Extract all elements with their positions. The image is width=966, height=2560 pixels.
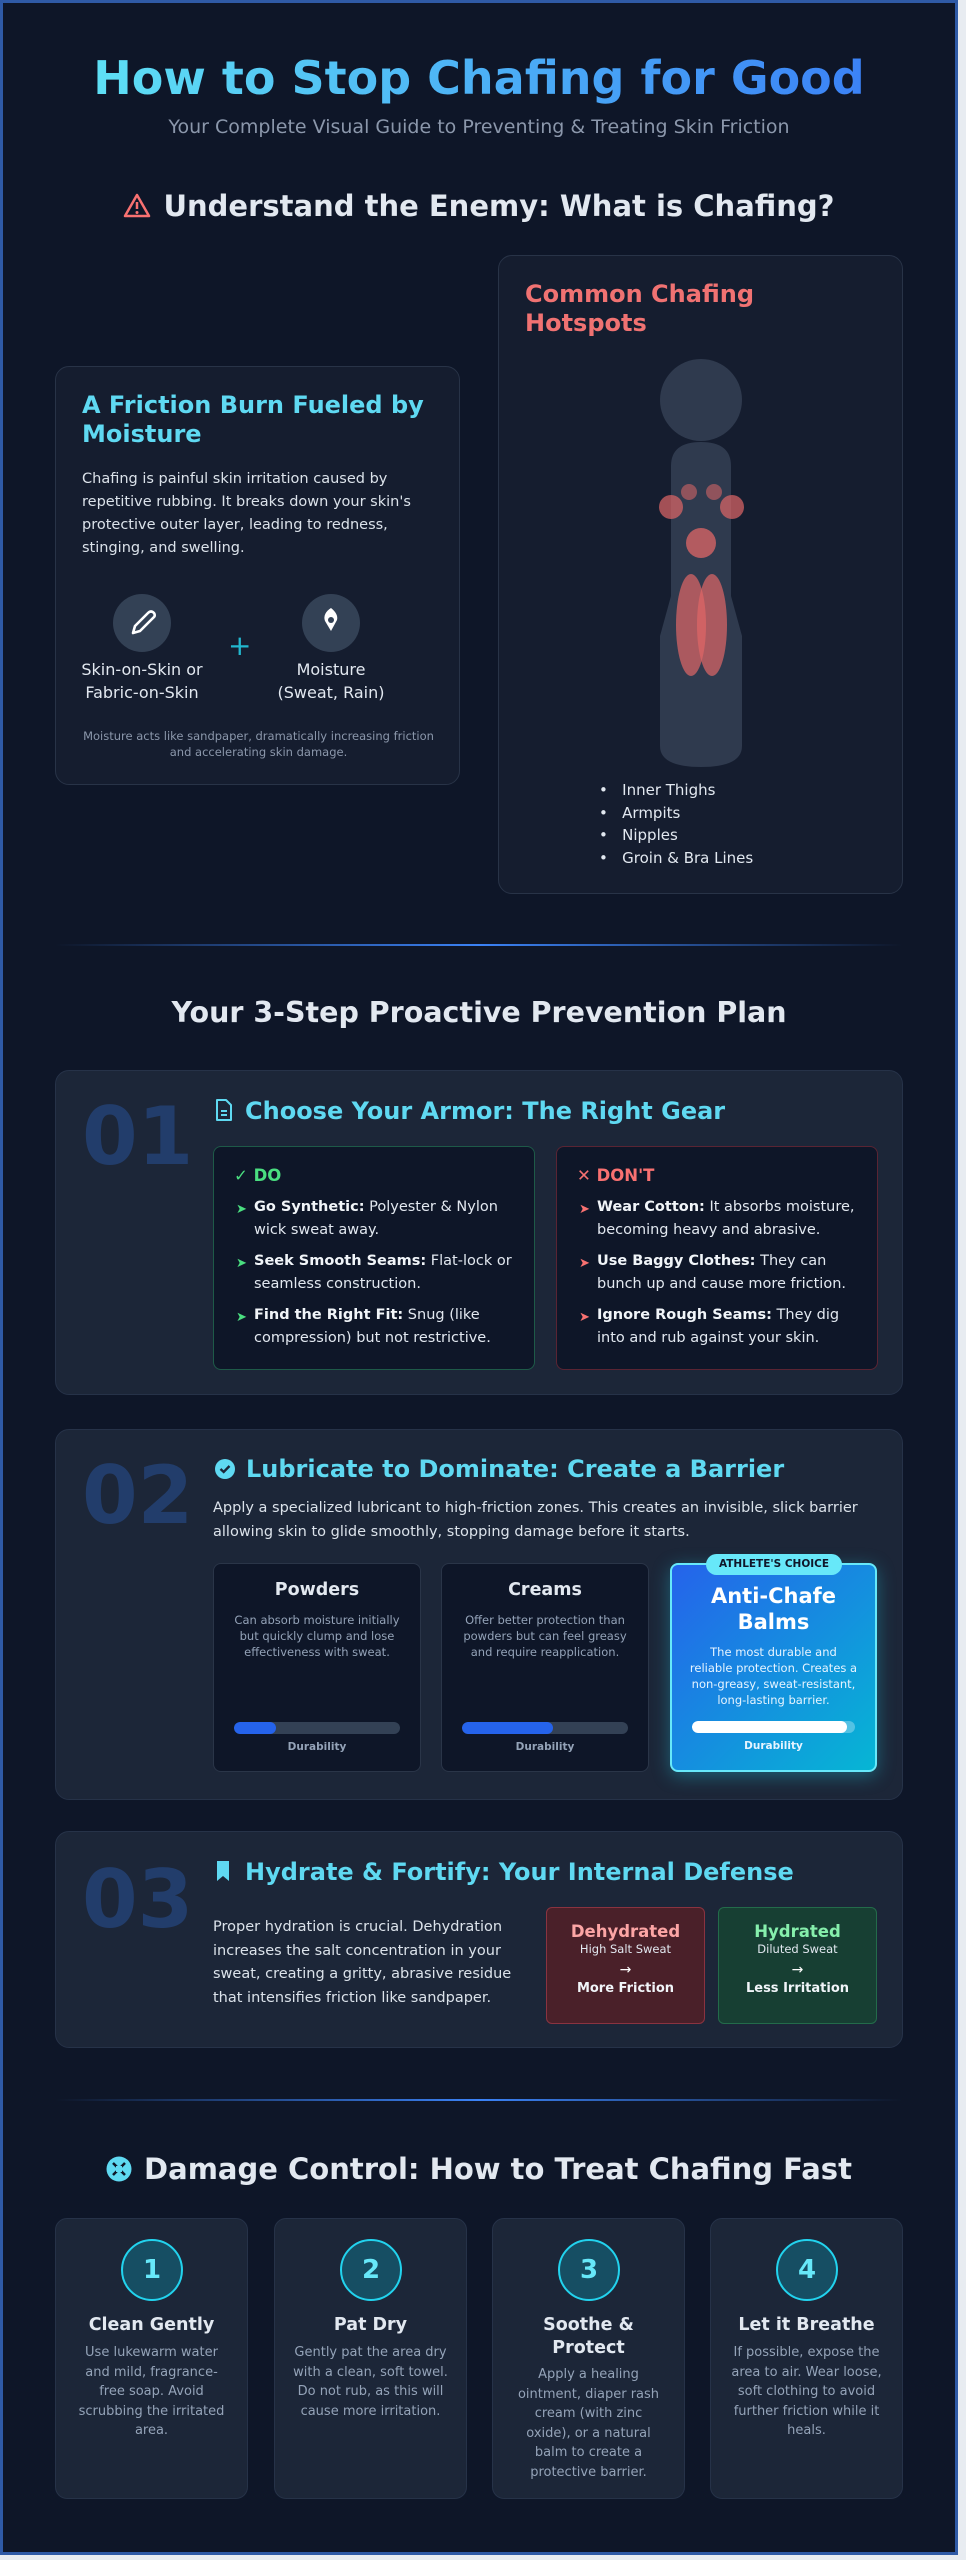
product: powders: Powders: [275, 1580, 359, 1600]
section heading: understand the enemy: Understand the Enemy: What is Chafing?: [163, 189, 834, 223]
big number: 01: [82, 1090, 193, 1183]
panel: step 01: [55, 1070, 903, 1395]
product: powders: Durability: [288, 1741, 346, 1753]
heading: Lubricate to Dominate: Create a Barrier: [246, 1455, 784, 1483]
box: hydrated: [718, 1907, 877, 2024]
product: balms: The most durable and reliable protection. Creates a non-greasy, sweat-resistant, long-lasting barrier.: [690, 1645, 857, 1707]
body diagram: [659, 359, 744, 767]
label: moisture: Moisture: [297, 660, 365, 679]
heading: Common Chafing Hotspots: [525, 280, 754, 337]
step card 1: Clean Gently: [89, 2315, 214, 2335]
icon: bandage: [106, 2156, 132, 2182]
DONT box: Use Baggy Clothes: They can bunch up and cause more friction.: [597, 1253, 846, 1292]
step card 3: [492, 2218, 685, 2499]
DO box: [213, 1146, 535, 1370]
DONT box: ➤: [579, 1202, 590, 1217]
DO box: ➤: [236, 1310, 247, 1325]
icon: moisture: [302, 594, 360, 652]
step card 4: Let it Breathe: [738, 2315, 875, 2335]
product: creams: Durability: [516, 1741, 574, 1753]
step card 2: 2: [362, 2255, 380, 2285]
box: hydrated: Less Irritation: [746, 1981, 849, 1996]
badge: ATHLETE'S CHOICE: [719, 1558, 829, 1570]
subtitle: Your Complete Visual Guide to Preventing & Treating Skin Friction: [168, 116, 790, 138]
box: hydrated: Hydrated: [754, 1922, 841, 1941]
label: skin-on-skin: Fabric-on-Skin: [85, 683, 199, 702]
icon: plus: +: [228, 629, 251, 662]
list: hotspots: • Nipples: [599, 826, 678, 844]
label: skin-on-skin: [81, 660, 203, 702]
box: hydrated: →: [792, 1962, 803, 1978]
step card 3: Soothe &: [543, 2315, 634, 2335]
text block: Proper hydration is crucial. Dehydration increases the salt concentration in your sweat, creating a gritty, abrasive residue that intensifies friction like sandpaper.: [213, 1919, 511, 2006]
box: dehydrated: [546, 1907, 705, 2024]
heading: Choose Your Armor: The Right Gear: [245, 1097, 725, 1125]
box: dehydrated: →: [620, 1962, 631, 1978]
step card 3: Apply a healing ointment, diaper rash cream (with zinc oxide), or a natural balm to create a protective barrier.: [518, 2367, 659, 2480]
step card 3: Protect: [552, 2338, 625, 2358]
product: powders: [213, 1563, 421, 1772]
step card 4: [710, 2218, 903, 2499]
big number: 03: [82, 1853, 193, 1946]
DO box: Seek Smooth Seams: Flat-lock or seamless construction.: [254, 1253, 512, 1292]
title: How to Stop Chafing for Good: [93, 51, 865, 105]
step card 2: Pat Dry: [334, 2315, 407, 2335]
DO box: Go Synthetic: Polyester & Nylon wick sweat away.: [254, 1199, 498, 1238]
product: powders: Can absorb moisture initially but quickly clump and lose effectiveness with sweat.: [234, 1613, 400, 1659]
DO box: ➤: [236, 1256, 247, 1271]
step card 2: Gently pat the area dry with a clean, soft towel. Do not rub, as this will cause more irritation.: [293, 2345, 448, 2418]
label: skin-on-skin: Skin-on-Skin or: [81, 660, 203, 679]
text block: Apply a specialized lubricant to high-friction zones. This creates an invisible, slick barrier allowing skin to glide smoothly, stopping damage before it starts.: [213, 1500, 858, 1540]
product: balms: [670, 1563, 877, 1772]
step card 4: 4: [798, 2255, 816, 2285]
box: dehydrated: More Friction: [577, 1981, 674, 1996]
big number: 02: [82, 1449, 193, 1542]
product: creams: Creams: [508, 1580, 582, 1600]
icon: rubbing: [113, 594, 171, 652]
panel: hotspots: [498, 255, 903, 894]
DONT box: ➤: [579, 1256, 590, 1271]
list: hotspots: • Armpits: [599, 804, 680, 822]
panel: step 03: [55, 1831, 903, 2048]
badge: [706, 1554, 842, 1575]
step card 1: [55, 2218, 248, 2499]
product: balms: Balms: [738, 1610, 809, 1634]
box: dehydrated: High Salt Sweat: [580, 1942, 671, 1956]
DONT box: [556, 1146, 878, 1370]
step card 1: 1: [143, 2255, 161, 2285]
DONT box: ➤: [579, 1310, 590, 1325]
section heading: prevention plan: Your 3-Step Proactive Prevention Plan: [171, 996, 787, 1029]
label: moisture: [278, 660, 384, 702]
section heading: damage control: Damage Control: How to Treat Chafing Fast: [144, 2152, 852, 2186]
step card 2: [274, 2218, 467, 2499]
text block: Chafing is painful skin irritation caused by repetitive rubbing. It breaks down your skin's protective outer layer, leading to redness, stinging, and swelling.: [82, 471, 411, 556]
product: balms: Anti-Chafe: [711, 1584, 836, 1608]
footnote: Moisture acts like sandpaper, dramatically increasing friction and accelerating skin damage.: [83, 729, 434, 759]
product: balms: Durability: [744, 1740, 803, 1752]
label: moisture: (Sweat, Rain): [278, 683, 384, 702]
product: creams: [441, 1563, 649, 1772]
product: creams: Offer better protection than powders but can feel greasy and require reapplication.: [463, 1613, 627, 1659]
heading: Hydrate & Fortify: Your Internal Defense: [245, 1858, 794, 1886]
DONT box: Wear Cotton: It absorbs moisture, becoming heavy and abrasive.: [597, 1199, 854, 1238]
panel: friction burn: [55, 366, 460, 785]
panel: step 02: [55, 1429, 903, 1800]
divider: [55, 2099, 903, 2101]
DONT box: ✕ DON'T: [577, 1166, 654, 1185]
step card 4: If possible, expose the area to air. Wear loose, soft clothing to avoid further friction while it heals.: [731, 2345, 882, 2438]
list: hotspots: [599, 781, 753, 866]
DO box: Find the Right Fit: Snug (like compression) but not restrictive.: [254, 1307, 491, 1346]
list: hotspots: • Inner Thighs: [599, 781, 715, 799]
list: hotspots: • Groin & Bra Lines: [599, 848, 753, 866]
step card 1: Use lukewarm water and mild, fragrance-free soap. Avoid scrubbing the irritated area.: [79, 2345, 224, 2438]
box: dehydrated: Dehydrated: [571, 1922, 680, 1941]
box: hydrated: Diluted Sweat: [757, 1942, 838, 1956]
icon: warning: [124, 194, 150, 218]
heading: A Friction Burn Fueled by Moisture: [82, 391, 424, 448]
divider: [55, 944, 903, 946]
DONT box: Ignore Rough Seams: They dig into and rub against your skin.: [597, 1307, 839, 1346]
DO box: ✓ DO: [234, 1166, 281, 1185]
step card 3: 3: [580, 2255, 598, 2285]
DO box: ➤: [236, 1202, 247, 1217]
